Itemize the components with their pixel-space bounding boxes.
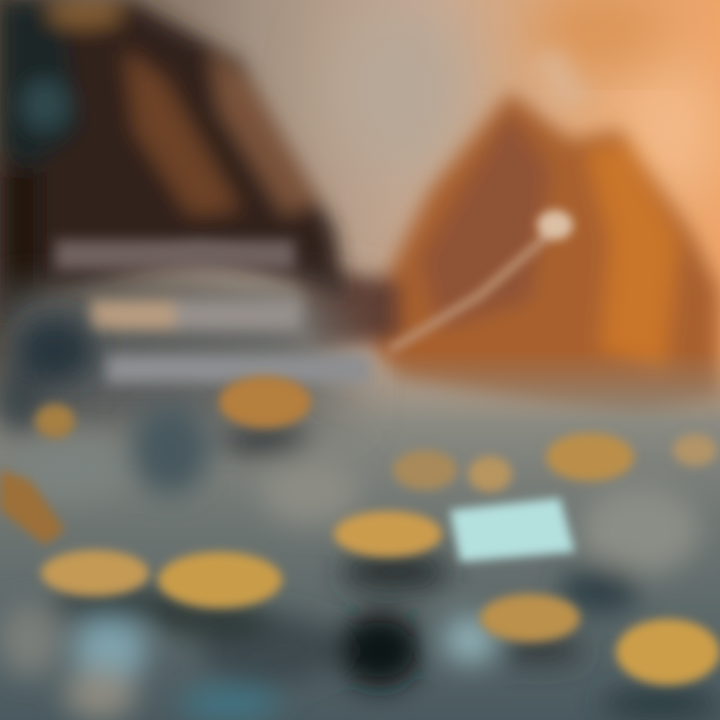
pale blue note [450, 498, 575, 562]
gold coins [0, 376, 720, 685]
pale block backing [0, 290, 370, 430]
rising line arrow [390, 210, 573, 350]
ground background [0, 350, 720, 720]
faded band of pale blocks [55, 240, 370, 383]
mountain: orange peaks [300, 50, 720, 420]
dark left ridge [0, 0, 345, 330]
sky background [0, 0, 720, 480]
ground texture: mottled stones [0, 318, 720, 720]
